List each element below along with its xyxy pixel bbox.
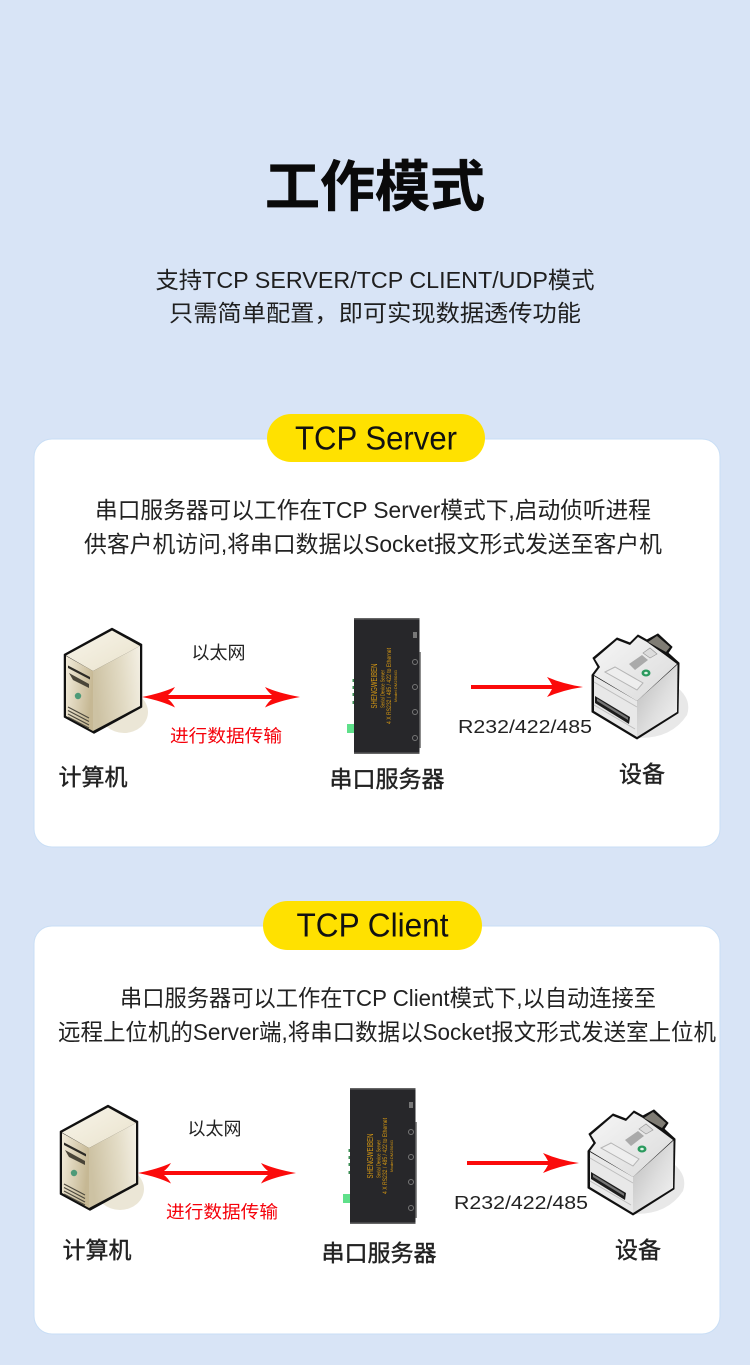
subtitle text: 支持TCP SERVER/TCP CLIENT/UDP模式 — [156, 267, 594, 293]
description text: 串口服务器可以工作在TCP Server模式下,启动侦听进程 — [95, 497, 651, 523]
icon: serial device server: Serial Device Server — [376, 1140, 382, 1178]
description text — [84, 497, 662, 557]
heading pill: TCP Server: TCP Server — [295, 420, 457, 458]
label: device: 设备 — [615, 1237, 661, 1263]
icon: serial device server — [343, 1088, 417, 1224]
arrow: to device — [467, 1153, 579, 1173]
label: computer: 计算机 — [58, 764, 128, 790]
icon: computer tower — [64, 628, 148, 733]
label: data transfer: 进行数据传输 — [170, 726, 283, 746]
icon: serial device server: SHENGWEIBEN — [369, 664, 379, 708]
label: serial server: 串口服务器 — [330, 766, 444, 792]
subtitle text — [156, 267, 594, 326]
heading pill: TCP Client — [263, 901, 482, 950]
label: computer: 计算机 — [62, 1237, 132, 1263]
heading pill: TCP Server — [267, 414, 485, 462]
heading pill: TCP Client: TCP Client — [296, 908, 449, 944]
icon: printer device — [592, 634, 688, 739]
label: serial protocols: R232/422/485 — [454, 1192, 588, 1213]
panel card — [34, 926, 720, 1334]
description text: 串口服务器可以工作在TCP Client模式下,以自动连接至 — [120, 985, 656, 1011]
subtitle text: 只需简单配置，即可实现数据透传功能 — [169, 300, 581, 326]
label: data transfer: 进行数据传输 — [166, 1202, 279, 1222]
description text: 供客户机访问,将串口数据以Socket报文形式发送至客户机 — [84, 531, 662, 557]
panel: TCP Server — [34, 414, 720, 847]
description text — [58, 985, 716, 1045]
icon: serial device server: Serial Device Server — [380, 670, 386, 708]
icon: serial device server: Model:DM2504G — [394, 670, 398, 702]
panel card — [34, 439, 720, 847]
icon: serial device server — [347, 618, 421, 754]
label: serial protocols: R232/422/485 — [458, 716, 592, 737]
arrow: to device — [471, 677, 583, 697]
icon: serial device server: SHENGWEIBEN — [365, 1134, 375, 1178]
title: 工作模式 — [265, 156, 485, 218]
icon: serial device server: 4 X RS232 / 485 / 422 to Ethernet — [383, 1118, 389, 1194]
panel: TCP Client — [34, 901, 720, 1334]
arrow: two-way data link — [138, 1163, 296, 1184]
label: ethernet: 以太网 — [188, 1119, 242, 1139]
label: ethernet: 以太网 — [192, 643, 246, 663]
description text: 远程上位机的Server端,将串口数据以Socket报文形式发送室上位机 — [58, 1019, 716, 1045]
arrow: two-way data link — [142, 687, 300, 708]
label: device: 设备 — [619, 761, 665, 787]
label: serial server: 串口服务器 — [322, 1240, 436, 1266]
icon: computer tower — [60, 1106, 144, 1210]
icon: printer device — [588, 1110, 684, 1215]
icon: serial device server: Model:DM2504G — [390, 1140, 394, 1172]
icon: serial device server: 4 X RS232 / 485 / 422 to Ethernet — [387, 648, 393, 724]
